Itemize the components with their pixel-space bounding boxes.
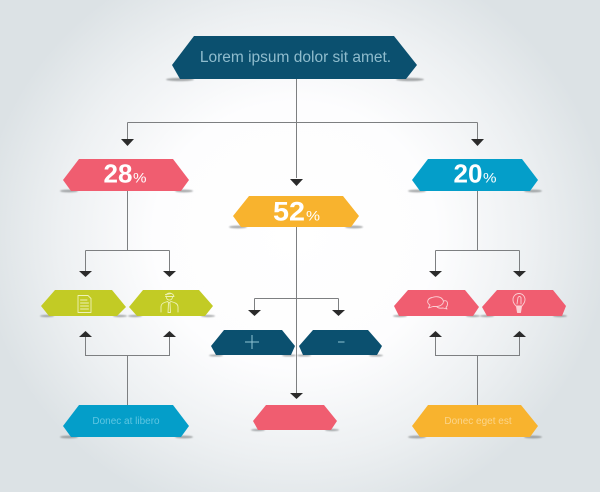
connectors: right branch [429,191,526,405]
icon: plus [245,335,259,349]
arrow: left branch down 1 [79,271,92,277]
arrow: to 28% [121,139,134,146]
icon: minus [338,341,344,343]
node: blue Donec at libero [60,405,193,438]
node: 28%: % [133,170,146,186]
arrow: centre branch down 2 [332,310,345,316]
arrow: to 52% [290,179,303,186]
icon: engineer [161,293,178,312]
node: 20%: % [483,170,496,186]
icon: document [78,296,91,312]
node: 52%: % [306,208,320,224]
node: yellow Donec eget est [408,405,542,438]
icon: light bulb [513,294,525,312]
connectors: left branch [79,191,176,405]
arrow: left branch up 2 [163,331,176,337]
arrow: centre branch down 1 [248,310,261,316]
node: 20%: 20 [454,158,482,188]
node: 28% [60,158,193,192]
node: 52% [229,196,363,228]
connectors: centre branch [248,227,345,399]
arrow: right branch down 1 [429,271,442,277]
node: red light bulb [480,290,567,317]
connectors: top node to the three percent nodes [121,79,484,186]
arrow: to 20% [471,139,484,146]
node: red speech bubbles [393,290,480,317]
node: 28%: 28 [104,158,132,188]
node: yellow Donec eget est: Donec eget est [444,416,512,427]
arrow: left branch down 2 [163,271,176,277]
arrow: left branch up 1 [79,331,92,337]
icon: speech bubbles [428,297,448,309]
node: green document [40,290,127,317]
title box [166,36,424,81]
node: navy minus [297,330,383,356]
arrow: to bottom centre node [290,393,303,399]
node: blue Donec at libero: Donec at libero [92,416,160,427]
node: red empty [251,405,339,431]
node: 20% [408,158,542,192]
title box: Lorem ipsum dolor sit amet. [200,49,391,66]
node: green person [128,290,215,317]
node: navy plus [209,330,296,356]
node: 52%: 52 [273,196,305,226]
arrow: right branch up 2 [513,331,526,337]
arrow: right branch down 2 [513,271,526,277]
arrow: right branch up 1 [429,331,442,337]
